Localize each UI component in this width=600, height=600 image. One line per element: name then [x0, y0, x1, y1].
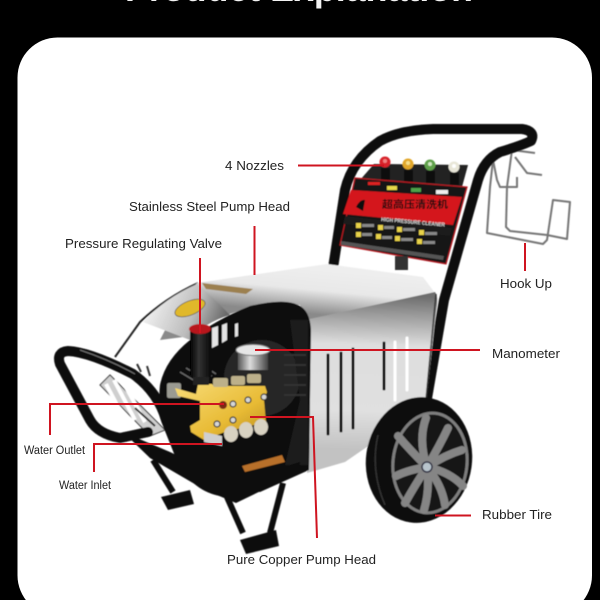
motor: [224, 340, 300, 416]
callout lines: [50, 166, 525, 538]
dark pump opening: [159, 302, 311, 492]
label: 4 nozzles: 4 Nozzles: [225, 159, 284, 173]
manometer gauge: [236, 344, 270, 370]
front handle tube: [59, 351, 228, 492]
left cover panel: [143, 284, 230, 340]
vent slats on opening edge: [212, 323, 238, 348]
stainless steel body: [305, 292, 437, 473]
label: water outlet: Water Outlet: [24, 445, 86, 457]
label: pressure regulating valve: Pressure Regulating Valve: [65, 237, 222, 251]
base plate: [123, 432, 300, 503]
control panel: HIGH PRESSURE CLEANER: [381, 217, 445, 229]
label: stainless steel pump head: Stainless Steel Pump Head: [129, 200, 290, 214]
wheel spokes: [396, 418, 463, 510]
vents: [328, 343, 384, 434]
label: manometer: Manometer: [492, 347, 560, 361]
rubber tire: [358, 390, 480, 530]
feet: [153, 460, 283, 533]
labels: [24, 159, 560, 567]
icon: handle frame: [333, 129, 532, 410]
label: hook up: Hook Up: [500, 277, 552, 291]
grey mesh: [167, 383, 181, 398]
control panel: [340, 178, 467, 264]
warning label: [173, 296, 207, 320]
label: pure copper pump head: Pure Copper Pump Head: [227, 553, 376, 567]
body side strip: [115, 283, 198, 357]
label: rubber tire: Rubber Tire: [482, 508, 552, 522]
icon: nozzle tray: [360, 164, 468, 187]
stainless steel top cover: [160, 264, 435, 340]
panel heading: 超高压清洗机: [382, 198, 448, 211]
base label: [242, 455, 285, 472]
water inlet fitting: [204, 432, 222, 446]
pump cooling fins: [180, 362, 216, 384]
body right edge: [426, 294, 436, 400]
machine connector: [395, 256, 408, 270]
icon: hanging hooks: [487, 150, 570, 244]
front grill: [100, 364, 165, 436]
icon: nozzles: [380, 156, 460, 185]
pressure washer product illustration: [59, 129, 570, 554]
pure copper pump head: [175, 374, 268, 446]
label: water inlet: Water Inlet: [59, 480, 112, 492]
pressure regulating valve: [189, 324, 212, 385]
